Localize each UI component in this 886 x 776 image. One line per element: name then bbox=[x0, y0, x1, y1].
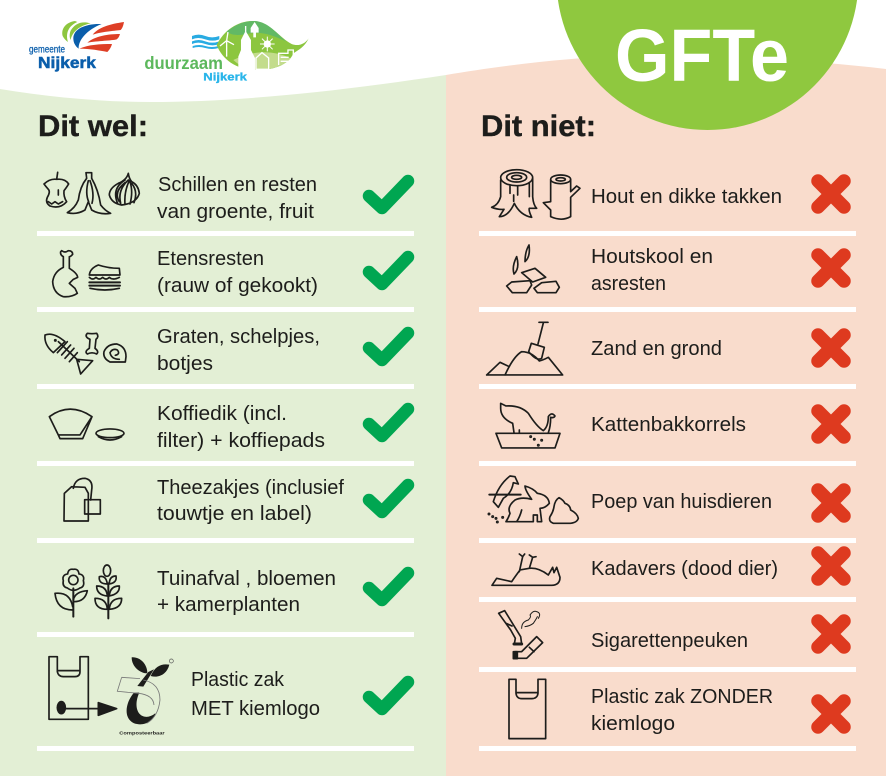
heading: Dit niet: Dit niet: bbox=[481, 110, 596, 143]
icon: plastic bag bbox=[509, 679, 546, 739]
column: dit wel text bbox=[157, 174, 344, 720]
column: dit wel text: Koffiedik (incl. bbox=[157, 403, 287, 425]
icon: tea bag bbox=[64, 478, 100, 521]
logo: duurzaam Nijkerk bbox=[144, 21, 309, 84]
column: dit wel text: van groente, fruit bbox=[157, 201, 314, 223]
column: dit wel text: touwtje en label) bbox=[157, 503, 312, 525]
column: dit niet text: Hout en dikke takken bbox=[591, 186, 782, 208]
column: dit niet text: asresten bbox=[591, 273, 666, 295]
column: dit niet text: Kattenbakkorrels bbox=[591, 414, 746, 436]
column: dit niet text: Houtskool en bbox=[591, 246, 713, 268]
logo: gemeente Nijkerk: gemeente bbox=[29, 44, 65, 55]
column: dit wel text: filter) + koffiepads bbox=[157, 430, 325, 452]
panel: dit niet background bbox=[446, 58, 886, 776]
column: dit niet text: Poep van huisdieren bbox=[591, 491, 772, 513]
heading: Dit wel: Dit wel: bbox=[38, 110, 148, 143]
column: dit niet text: Zand en grond bbox=[591, 338, 722, 360]
logo: gemeente Nijkerk bbox=[29, 21, 124, 72]
logo: duurzaam Nijkerk: Nijkerk bbox=[203, 72, 248, 84]
icon: sand pile with shovel bbox=[487, 322, 563, 375]
icon: cigarette butts with smoke bbox=[499, 611, 543, 659]
column: dit wel text: Theezakjes (inclusief bbox=[157, 477, 344, 499]
badge: GFTe bbox=[556, 0, 858, 130]
column: dit wel text: (rauw of gekookt) bbox=[157, 275, 318, 297]
column: dit niet text: kiemlogo bbox=[591, 713, 675, 735]
icon: kiem compost logo bbox=[117, 657, 173, 736]
icons: flower, plant bbox=[55, 565, 122, 618]
column: dit wel text: botjes bbox=[157, 353, 213, 375]
column: dit wel text: + kamerplanten bbox=[157, 594, 300, 616]
icon: plastic bag with arrow bbox=[49, 657, 117, 719]
icon: dead bird bbox=[492, 554, 560, 585]
column: dit niet text: Plastic zak ZONDER bbox=[591, 686, 773, 708]
icons: chicken leg, sandwich bbox=[53, 251, 120, 297]
column: dit wel text: MET kiemlogo bbox=[191, 698, 320, 720]
icon: cat in litter box bbox=[496, 403, 560, 448]
column: dit niet text: Sigarettenpeuken bbox=[591, 630, 748, 652]
icon: kiem compost logo: Composteerbaar bbox=[119, 731, 165, 736]
row separators bbox=[37, 231, 856, 751]
panel: dit wel background bbox=[0, 75, 446, 776]
icons: coffee filter, coffee pad bbox=[49, 409, 124, 440]
logo: gemeente Nijkerk: Nijkerk bbox=[38, 55, 97, 72]
column: dit wel text: Plastic zak bbox=[191, 669, 285, 691]
column: dit wel text: Tuinafval , bloemen bbox=[157, 568, 336, 590]
column: dit wel text: Etensresten bbox=[157, 248, 264, 270]
icons: bird, rabbit, droppings bbox=[488, 476, 578, 523]
icons: apple core, banana peel, onion bbox=[44, 172, 139, 214]
badge: GFTe: GFTe bbox=[615, 14, 789, 97]
check marks bbox=[369, 181, 408, 709]
column: dit wel text: Schillen en resten bbox=[158, 174, 317, 196]
cross marks bbox=[818, 181, 844, 727]
column: dit wel text: Graten, schelpjes, bbox=[157, 326, 320, 348]
icon: charcoal and ash bbox=[507, 245, 559, 293]
logo: duurzaam Nijkerk: duurzaam bbox=[144, 53, 223, 73]
icons: fish bones, bone, snail shell bbox=[45, 333, 126, 374]
icons: tree stump, log bbox=[492, 170, 580, 219]
column: dit niet text bbox=[591, 186, 782, 735]
column: dit niet text: Kadavers (dood dier) bbox=[591, 558, 778, 580]
